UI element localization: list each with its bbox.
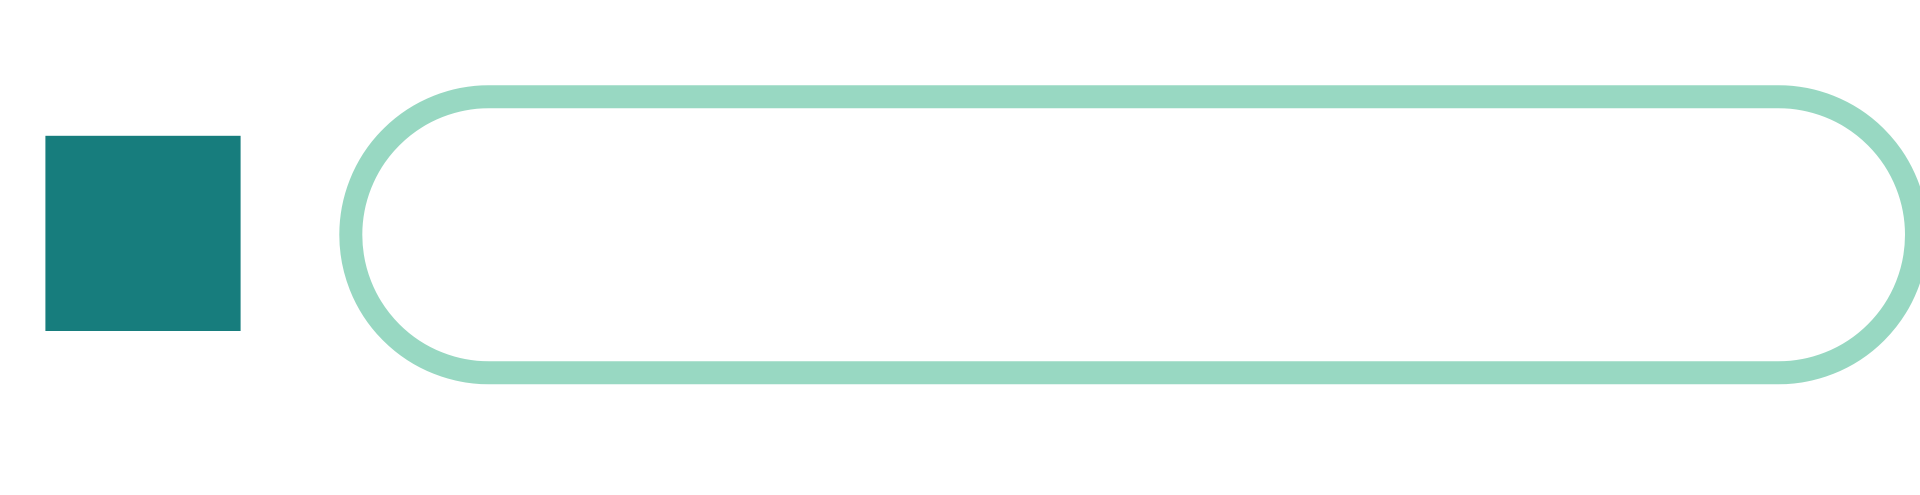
mint rounded pill outline xyxy=(351,97,1916,373)
teal square xyxy=(45,136,241,331)
